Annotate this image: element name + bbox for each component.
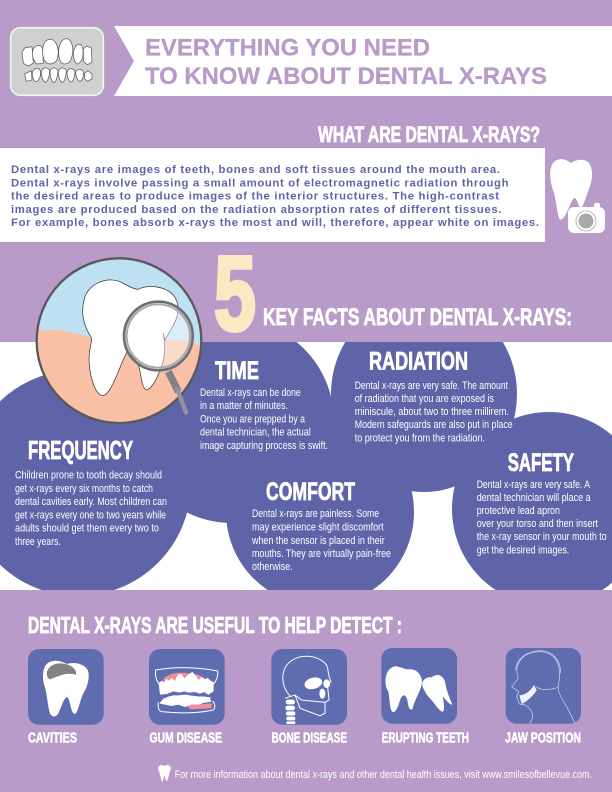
definition text: Dental x-rays are images of teeth, bones and soft tissues around the mouth area.	[11, 164, 500, 176]
fact: radiation: RADIATION	[369, 347, 468, 375]
heading: useful to help detect: DENTAL X-RAYS ARE USEFUL TO HELP DETECT :	[28, 612, 402, 638]
big numeral 5: 5	[214, 235, 256, 353]
comfort text	[251, 508, 391, 573]
definition text: For example, bones absorb x-rays the most and will, therefore, appear white on images.	[11, 217, 539, 229]
fact: frequency: FREQUENCY	[28, 435, 133, 465]
label: erupting teeth: ERUPTING TEETH	[382, 730, 469, 747]
panel: definition	[0, 148, 545, 242]
title: EVERYTHING YOU NEED	[145, 35, 430, 62]
frequency text: get x-rays every one to two years while	[15, 510, 166, 522]
header icon: teeth	[10, 26, 104, 96]
definition text: Dental x-rays involve passing a small amount of electromagnetic radiation through	[11, 177, 509, 189]
radiation text: to protect you from the radiation.	[355, 432, 485, 444]
time text: dental technician, the actual	[200, 426, 311, 438]
comfort text: Dental x-rays are painless. Some	[252, 508, 379, 520]
frequency text: adults should get them every two to	[15, 522, 159, 534]
icon: tooth with camera	[550, 159, 605, 233]
safety text	[477, 479, 607, 556]
radiation text: Modern safeguards are also put in place	[355, 419, 513, 431]
time text: image capturing process is swift.	[200, 440, 328, 452]
fact: time: TIME	[215, 357, 259, 385]
radiation text: of radiation that you are exposed is	[355, 393, 494, 405]
fact: safety: SAFETY	[508, 449, 574, 477]
icon: gum disease	[149, 649, 225, 725]
safety text: protective lead apron	[477, 505, 560, 517]
time text: in a matter of minutes.	[200, 400, 288, 412]
fact: safety	[477, 449, 607, 556]
title banner	[114, 26, 612, 96]
title	[145, 35, 547, 90]
frequency text: dental cavities early. Most children can	[15, 496, 167, 508]
fact: comfort	[251, 478, 391, 573]
frequency text: Children prone to tooth decay should	[15, 470, 162, 482]
frequency text: three years.	[15, 536, 61, 548]
white band	[0, 342, 612, 590]
icon: bone disease	[271, 649, 347, 725]
icon: jaw position	[506, 648, 581, 724]
radiation text: miniscule, about two to three millirem.	[355, 406, 509, 418]
radiation text: Dental x-rays are very safe. The amount	[355, 380, 509, 392]
fact: frequency	[15, 435, 167, 548]
definition text: the desired areas to produce images of the interior structures. The high-contrast	[11, 190, 499, 202]
fact: comfort: COMFORT	[266, 478, 355, 506]
time text	[200, 387, 328, 452]
frequency text	[15, 470, 167, 548]
label: jaw position: JAW POSITION	[505, 730, 581, 747]
illustration: tooth under magnifying glass	[36, 257, 202, 424]
fact: radiation	[355, 347, 513, 444]
definition text: images are produced based on the radiation absorption rates of different tissues.	[11, 204, 501, 216]
comfort text: may experience slight discomfort	[252, 522, 384, 534]
definition text	[11, 164, 539, 229]
icon: erupting teeth	[381, 648, 457, 724]
time text: Once you are prepped by a	[200, 414, 306, 426]
frequency text: get x-rays every six months to catch	[15, 483, 153, 495]
icon: footer tooth	[158, 765, 171, 782]
panel: fact bubbles	[0, 342, 612, 590]
comfort text: when the sensor is placed in their	[251, 535, 385, 547]
comfort text: otherwise.	[252, 561, 293, 573]
label: gum disease: GUM DISEASE	[150, 730, 222, 747]
comfort text: mouths. They are virtually pain-free	[252, 548, 391, 560]
radiation text	[355, 380, 513, 444]
safety text: get the desired images.	[477, 544, 569, 556]
icon: cavities	[28, 649, 104, 725]
fact: time	[200, 357, 328, 452]
label: bone disease: BONE DISEASE	[272, 730, 347, 747]
label: cavities: CAVITIES	[28, 730, 77, 747]
title: TO KNOW ABOUT DENTAL X-RAYS	[145, 63, 547, 90]
time text: Dental x-rays can be done	[200, 387, 301, 399]
